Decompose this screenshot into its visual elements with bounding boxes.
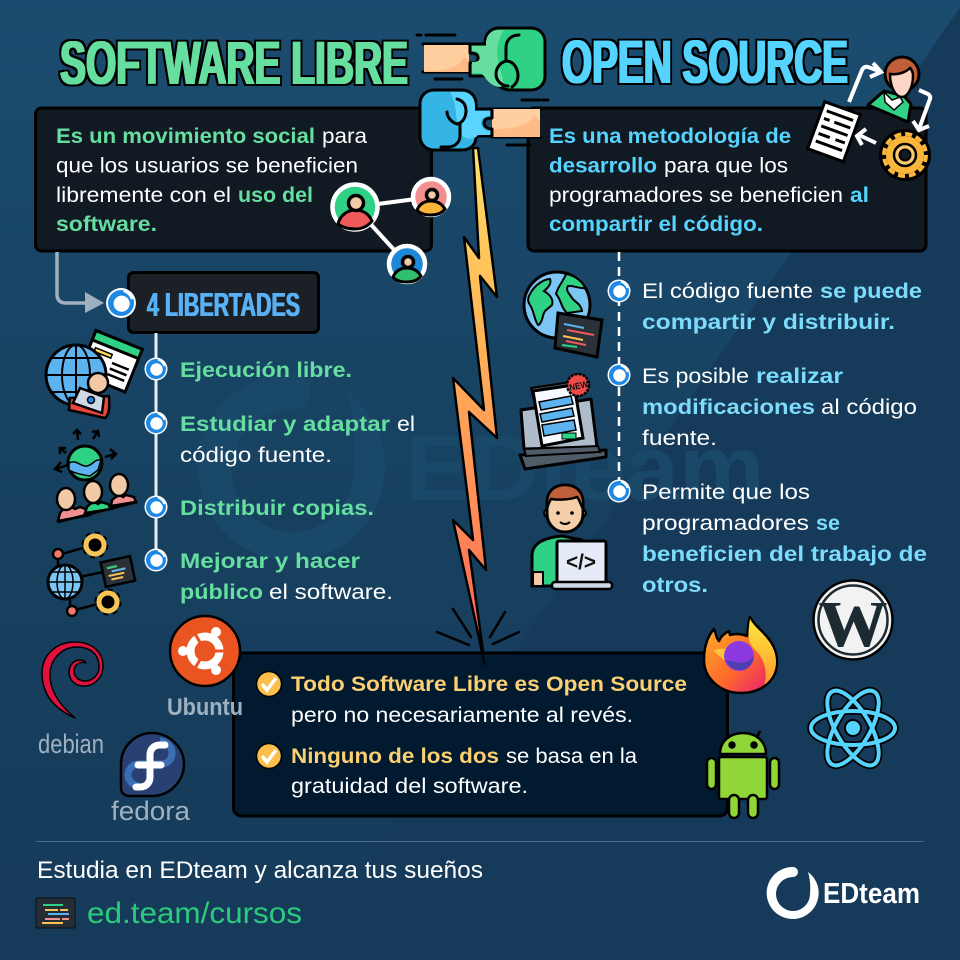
panel: open source definition: para que los <box>664 154 788 178</box>
timeline: 4 libertades <box>106 288 168 572</box>
green puzzle with hand <box>417 28 545 90</box>
panel: conclusion: gratuidad del software. <box>291 774 528 798</box>
icon: laptop with new page <box>520 374 606 469</box>
panel: open source definition: desarrollo <box>549 154 657 178</box>
list: libertades: Ejecución libre. <box>180 358 352 382</box>
list: open source: programadores <box>642 511 809 535</box>
icon: programmer with laptop <box>532 485 612 589</box>
list: open source: al código <box>821 395 917 419</box>
logo: firefox <box>704 617 777 693</box>
list: open source: Es posible <box>642 364 749 388</box>
list: open source: modificaciones <box>642 395 815 419</box>
list: open source <box>642 279 927 597</box>
list: libertades: Distribuir copias. <box>180 496 374 520</box>
list: open source: se <box>816 511 840 535</box>
icon: globe with code window <box>524 272 602 357</box>
list: open source: compartir y distribuir. <box>642 310 895 334</box>
panel: software libre definition <box>36 108 432 251</box>
panel: open source definition <box>528 108 926 251</box>
icon: puzzle handshake <box>417 28 548 150</box>
gear <box>883 133 927 177</box>
panel: software libre definition: para <box>322 124 367 148</box>
icon: check 2 <box>256 744 282 768</box>
bolt tip over panel <box>476 625 485 665</box>
panel: open source definition: programadores se beneficien <box>549 183 843 207</box>
heading: 4 libertades <box>128 272 318 332</box>
panel: software libre definition: uso del <box>238 183 313 207</box>
panel: conclusion: pero no necesariamente al revés. <box>291 703 633 727</box>
list: libertades: el <box>397 412 415 436</box>
logo: ubuntu: Ubuntu <box>167 694 243 721</box>
workflow arrows <box>849 63 930 145</box>
panel: open source definition: al <box>850 183 869 207</box>
logo: wordpress: W <box>819 588 887 661</box>
icon: user network <box>332 179 449 282</box>
list: open source: otros. <box>642 573 708 597</box>
icon: laptop with new page: NEW <box>568 379 589 393</box>
panel: software libre definition: libremente con el <box>56 183 231 207</box>
list: libertades: código fuente. <box>180 443 332 467</box>
list: libertades <box>180 358 415 604</box>
icon: globe and browser user <box>46 331 142 418</box>
list: open source: realizar <box>756 364 844 388</box>
document <box>808 102 860 162</box>
footer link: ed.team/cursos <box>87 897 302 930</box>
list: open source: El código fuente <box>642 279 813 303</box>
icon: developer workflow <box>808 57 930 177</box>
watermark: EDteam <box>198 373 765 561</box>
icon: check 1 <box>256 672 282 696</box>
people <box>57 474 137 522</box>
list: open source: Permite que los <box>642 480 810 504</box>
logo: android <box>707 731 779 818</box>
watermark: EDteam: EDteam <box>405 416 765 520</box>
list: open source: beneficien del trabajo de <box>642 542 927 566</box>
logo: debian: debian <box>38 729 104 759</box>
list: libertades: Estudiar y adaptar <box>180 412 391 436</box>
logo: react <box>811 683 895 773</box>
title: Software Libre: SOFTWARE LIBRE <box>60 29 408 97</box>
impact lines <box>437 609 519 645</box>
footer tagline: Estudia en EDteam y alcanza tus sueños <box>37 857 483 884</box>
icon: code window <box>36 898 75 928</box>
list: libertades: público <box>180 580 263 604</box>
list: libertades: el software. <box>269 580 393 604</box>
logo: EDteam: EDteam <box>823 878 920 910</box>
panel: software libre definition: Es un movimiento social <box>56 124 315 148</box>
panel: open source definition: Es una metodología de <box>549 124 791 148</box>
user node green <box>332 184 378 230</box>
list: open source: fuente. <box>642 426 717 450</box>
panel: conclusion: Todo Software Libre es Open Source <box>291 672 687 696</box>
icon: globe, gears and code <box>48 536 135 616</box>
arrow to 4 libertades <box>57 252 104 313</box>
logo: fedora <box>111 733 191 826</box>
icon: programmer with laptop: </> <box>566 551 596 574</box>
footer divider <box>36 841 924 842</box>
logo: fedora: fedora <box>111 796 191 826</box>
user node pink <box>413 179 449 215</box>
person <box>868 57 919 122</box>
blue puzzle with hand <box>420 90 548 150</box>
distribution arrows <box>55 430 116 472</box>
timeline: open source <box>608 252 630 502</box>
list: libertades: Mejorar y hacer <box>180 549 361 573</box>
panel: conclusion: Ninguno de los dos <box>291 744 499 768</box>
list: open source: se puede <box>820 279 922 303</box>
panel: conclusion <box>234 653 728 816</box>
panel: software libre definition: que los usuarios se beneficien <box>56 154 358 178</box>
lightning bolt <box>453 148 497 665</box>
user node blue <box>389 246 425 282</box>
panel: software libre definition: software. <box>56 212 157 236</box>
logo: EDteam <box>767 867 920 919</box>
panel: conclusion: se basa en la <box>506 744 637 768</box>
logo: debian <box>38 642 104 759</box>
icon: world and people <box>55 430 137 522</box>
panel: open source definition: compartir el código. <box>549 212 763 236</box>
logo: ubuntu <box>167 616 243 721</box>
heading: 4 libertades: 4 LIBERTADES <box>147 286 300 323</box>
